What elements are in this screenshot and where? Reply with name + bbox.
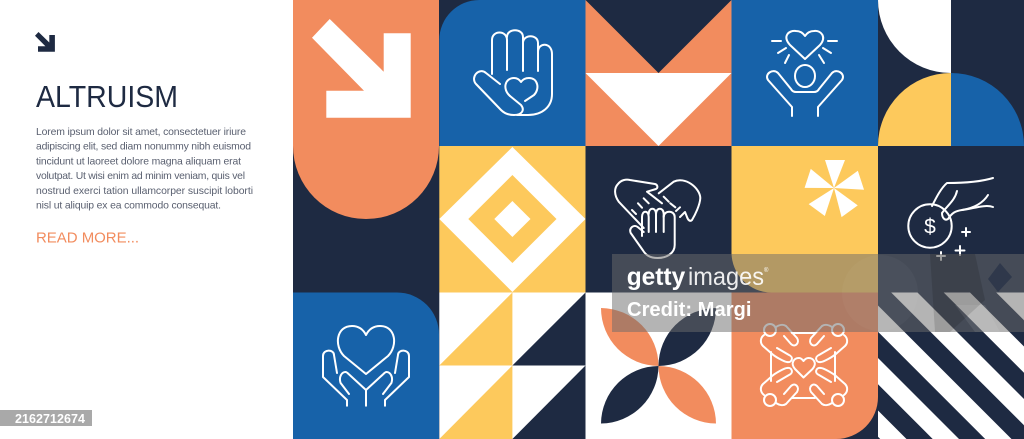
icon: small arrow [35, 32, 55, 52]
body text: tincidunt ut laoreet dolore magna aliquam erat [36, 156, 241, 167]
panel: triangles [439, 292, 586, 439]
icon: hand dropping coin [908, 178, 993, 260]
panel: navy mosaic background [293, 0, 1024, 439]
read more link: READ MORE... [36, 229, 139, 246]
body text: Lorem ipsum dolor sit amet, consectetuer iriure [36, 127, 246, 138]
body text [36, 127, 253, 212]
panel: text column [35, 32, 253, 246]
panel: blue hands holding heart [293, 292, 439, 439]
watermark logo: getty [627, 263, 685, 291]
icon: four people around heart [761, 324, 847, 406]
image id label [0, 410, 92, 426]
title: ALTRUISM [36, 79, 178, 114]
image id label: 2162712674 [15, 412, 85, 426]
watermark credit: Credit: Margi [627, 299, 752, 321]
icon: hand dropping coin: $ [924, 216, 936, 238]
watermark band: images [688, 263, 764, 291]
panel: diagonal stripes [878, 292, 1024, 439]
body text: volutpat. Ut wisi enim ad minim veniam, quis vel [36, 171, 245, 182]
icon: open hand with heart [474, 30, 552, 115]
icon: hands holding heart [323, 326, 409, 406]
panel: orange arch with arrow [293, 0, 439, 219]
body text: nostrud exerci tation ullamcorper suscipit loborti [36, 186, 253, 197]
panel: quarter circles [878, 0, 1024, 146]
icon: large arrow [312, 19, 411, 118]
panel: blue person with heart [732, 0, 878, 146]
body text: adipiscing elit, sed diam nonummy nibh euismod [36, 142, 251, 153]
panel: petals [586, 292, 732, 439]
panel: orange triangles [586, 0, 732, 146]
icon: asterisk [805, 160, 864, 217]
panel: yellow diamond [439, 146, 586, 292]
icon: person raising heart [767, 31, 843, 116]
icon: three joined hands [615, 180, 700, 258]
panel: orange hands around heart [732, 292, 878, 439]
watermark band [612, 254, 1024, 332]
panel: yellow asterisk [732, 146, 878, 292]
panel: blue hand with heart [439, 0, 586, 146]
watermark band: ® [764, 267, 769, 274]
body text: nisl ut aliquip ex ea commodo consequat. [36, 200, 221, 212]
